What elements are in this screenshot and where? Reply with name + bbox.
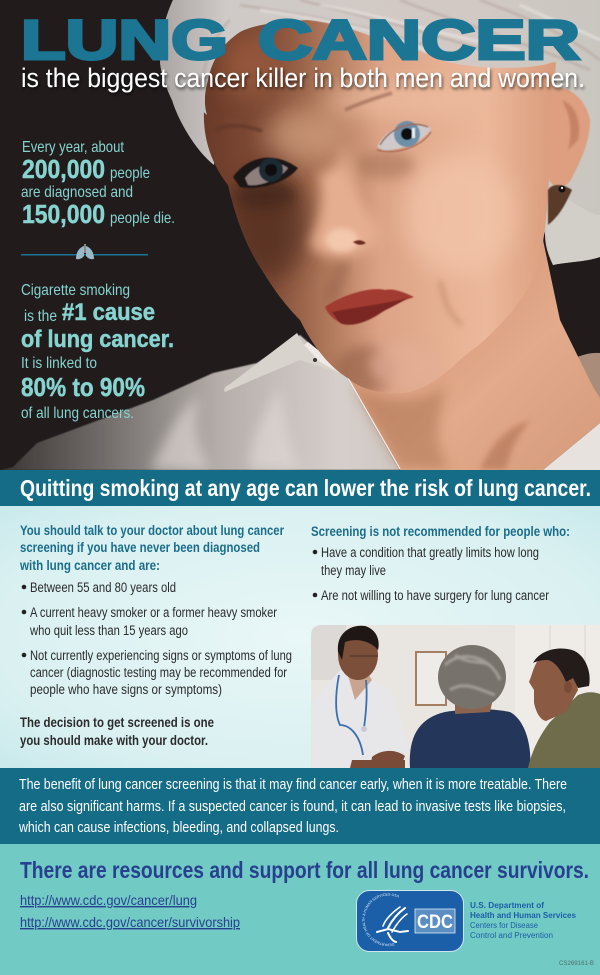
CDC mark: CDC — [417, 912, 453, 933]
text block: who should talk to a doctor: people who have signs or symptoms) — [30, 682, 222, 697]
text block: who screening is not for: Are not willing to have surgery for lung cancer — [321, 588, 549, 603]
text block: who screening is not for: they may live — [321, 563, 386, 578]
statistics: yearly diagnoses and deaths: 200,000 — [22, 154, 105, 184]
statistics: smoking as number one cause: of all lung cancers. — [21, 405, 134, 422]
title: LUNG CANCER: LUNG — [21, 8, 228, 71]
statistics: yearly diagnoses and deaths: people — [110, 165, 150, 182]
panel: benefit and harms of screening: which can cause infections, bleeding, and collapsed lungs. — [18, 820, 339, 836]
text block: who screening is not for: Have a condition that greatly limits how long — [321, 545, 539, 560]
face — [204, 10, 556, 393]
neck — [348, 240, 600, 470]
statistics: smoking as number one cause: #1 cause — [62, 299, 155, 326]
text block: who should talk to a doctor: The decision to get screened is one — [20, 715, 214, 730]
blouse right collar — [543, 423, 600, 470]
icon: eagle — [377, 907, 408, 942]
text block: who screening is not for — [311, 523, 570, 603]
statistics: smoking as number one cause: of lung cancer. — [21, 326, 174, 353]
statistics: smoking as number one cause — [21, 282, 174, 422]
text block: who should talk to a doctor: You should talk to your doctor about lung cancer — [20, 522, 284, 538]
text block: who should talk to a doctor: you should make with your doctor. — [20, 733, 208, 748]
text block: who should talk to a doctor: Between 55 and 80 years old — [30, 580, 176, 595]
text block: agency names: Control and Prevention — [470, 931, 553, 940]
lips — [325, 289, 414, 325]
hair back — [160, 0, 600, 265]
resource links — [20, 892, 240, 930]
statistics: yearly diagnoses and deaths: are diagnosed and — [21, 184, 133, 201]
nose — [310, 165, 380, 258]
publication code: CS269161-B — [559, 960, 594, 967]
title: LUNG CANCER: CANCER — [258, 8, 580, 71]
text block: who should talk to a doctor: screening if you have never been diagnosed — [20, 539, 260, 555]
photo: doctor talking with a couple — [311, 625, 600, 768]
background: dark photo backdrop — [0, 0, 600, 470]
ear — [547, 87, 590, 187]
brows — [345, 93, 392, 110]
panel: benefit and harms of screening — [0, 768, 600, 844]
text block: agency names: Centers for Disease — [470, 921, 539, 930]
blouse — [0, 335, 400, 470]
text block: agency names — [470, 901, 577, 940]
doctor — [312, 626, 410, 768]
left eye — [233, 158, 298, 188]
logo: HHS and CDC — [356, 890, 464, 952]
statistics: yearly diagnoses and deaths: people die. — [110, 210, 175, 227]
right eye — [377, 121, 431, 152]
resource links: http://www.cdc.gov/cancer/lung — [20, 892, 197, 908]
title: LUNG CANCER — [21, 8, 580, 71]
man in olive jacket — [528, 649, 600, 768]
text block: who should talk to a doctor: with lung cancer and are: — [19, 557, 160, 573]
text block: agency names: Health and Human Services — [470, 911, 577, 920]
blouse placket edge — [348, 378, 400, 469]
collar — [224, 333, 324, 392]
logo: HHS and CDC: DEPARTMENT OF HEALTH & HUMAN SERVICES USA — [362, 893, 399, 946]
text block: who should talk to a doctor — [19, 522, 292, 748]
photo: older woman with white hair looking at viewer — [0, 0, 600, 470]
divider with lungs icon — [21, 244, 148, 259]
resource links: http://www.cdc.gov/cancer/survivorship — [20, 914, 240, 930]
statistics: yearly diagnoses and deaths: 150,000 — [22, 199, 105, 229]
statistics: smoking as number one cause: is the — [24, 308, 57, 325]
panel: screening background — [0, 506, 600, 768]
face shading — [232, 170, 308, 280]
woman seen from behind — [410, 645, 530, 768]
text block: who should talk to a doctor: cancer (diagnostic testing may be recommended for — [30, 665, 287, 680]
statistics: smoking as number one cause: Cigarette smoking — [21, 282, 130, 299]
statistics: smoking as number one cause: 80% to 90% — [21, 372, 145, 402]
statistics: smoking as number one cause: It is linked to — [21, 355, 97, 372]
hair bangs — [160, 0, 600, 115]
banner: quitting smoking — [0, 470, 600, 506]
text block: who should talk to a doctor: A current heavy smoker or a former heavy smoker — [30, 605, 277, 620]
text block: who should talk to a doctor: Not currently experiencing signs or symptoms of lung — [30, 648, 292, 663]
text block: agency names: U.S. Department of — [470, 901, 544, 910]
statistics: yearly diagnoses and deaths — [21, 139, 175, 229]
earring — [548, 185, 572, 225]
wall frame — [416, 652, 446, 705]
statistics: yearly diagnoses and deaths: Every year, about — [22, 139, 124, 156]
text block: who should talk to a doctor: who quit less than 15 years ago — [29, 623, 188, 638]
shoulder right — [577, 353, 600, 400]
panel: footer background — [0, 844, 600, 975]
